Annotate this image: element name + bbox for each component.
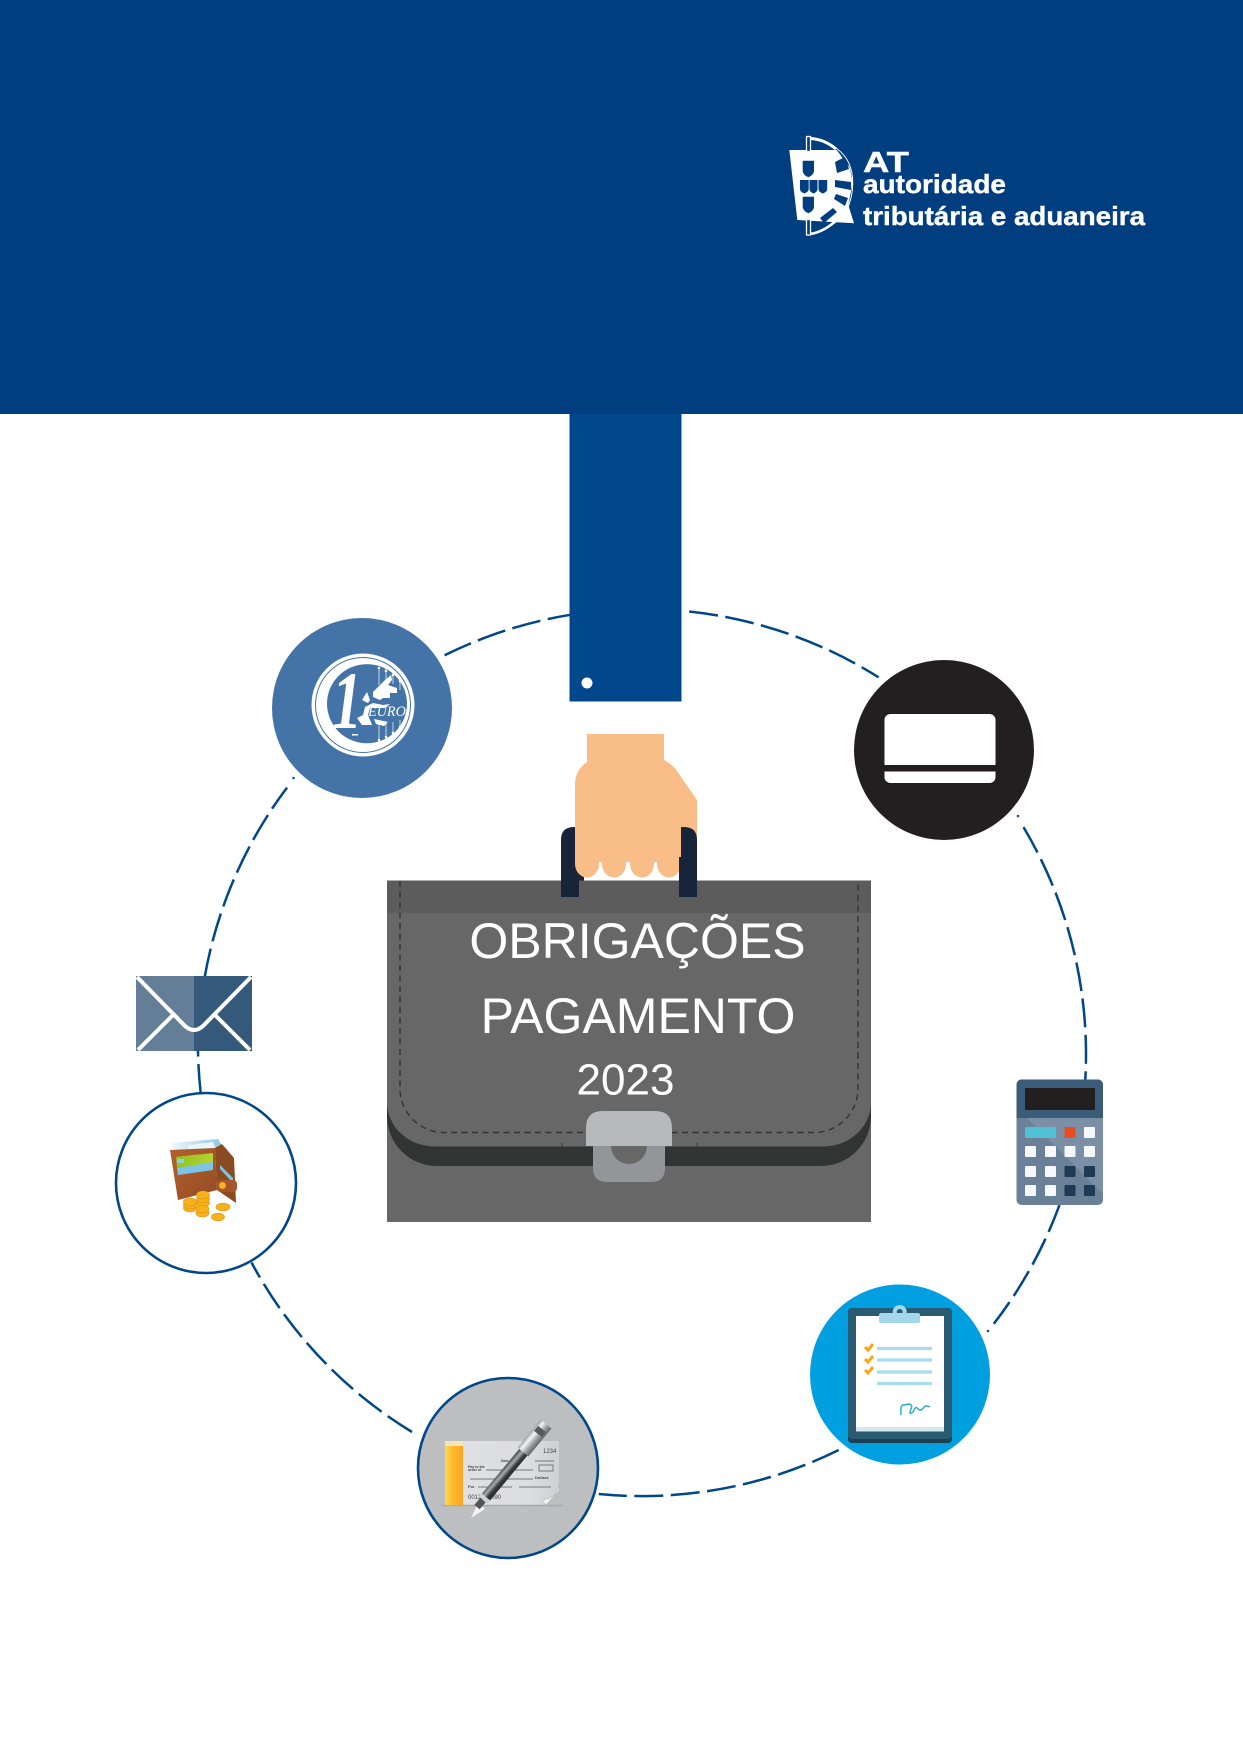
cheque shelf <box>441 1504 563 1506</box>
coin numeral: 1 <box>332 655 362 746</box>
calculator display <box>1025 1088 1095 1110</box>
handle right <box>679 827 697 897</box>
signature <box>901 1404 930 1415</box>
cheque lines <box>470 1461 554 1487</box>
cheque text: 090 <box>491 1495 502 1501</box>
clasp lower <box>593 1146 665 1182</box>
icon: bank card <box>854 660 1034 840</box>
cheque text: Dollars <box>535 1475 549 1480</box>
wallet card green <box>176 1153 213 1168</box>
cheque text: 1234 <box>543 1449 557 1455</box>
envelope flap lines <box>137 977 251 1050</box>
title: OBRIGAÇÕES <box>469 913 806 969</box>
cheque stub <box>445 1441 463 1505</box>
logo wordmark: tributária e aduaneira <box>863 201 1146 231</box>
europe map <box>352 675 397 736</box>
cheque text <box>468 1449 557 1501</box>
handle left <box>561 827 584 897</box>
wallet flap pocket <box>220 1165 233 1183</box>
title <box>469 913 806 1104</box>
title: PAGAMENTO <box>481 988 795 1044</box>
title: 2023 <box>577 1056 674 1104</box>
icon: wallet and coins <box>116 1093 296 1273</box>
hand <box>575 734 697 878</box>
logo wordmark <box>863 147 1146 231</box>
calculator shade <box>1027 1118 1103 1194</box>
card <box>884 714 996 783</box>
pen <box>471 1424 546 1518</box>
coin star lines <box>378 667 401 742</box>
icon: clipboard <box>810 1284 990 1464</box>
flap shadow <box>387 1103 871 1166</box>
coins <box>184 1191 230 1221</box>
stitching <box>400 881 858 1132</box>
wallet paper <box>172 1139 228 1156</box>
icon: euro coin <box>272 618 452 798</box>
paper <box>856 1316 944 1431</box>
icon: envelope <box>136 976 252 1051</box>
cheque page curl <box>542 1484 559 1505</box>
cuff button <box>582 678 592 688</box>
icon: cheque and pen <box>418 1378 598 1558</box>
clip <box>879 1305 920 1323</box>
clasp hole <box>611 1146 647 1164</box>
dashed ring connecting the icons <box>198 612 1086 1496</box>
cheque text: order of <box>468 1468 482 1472</box>
sleeve <box>570 414 682 702</box>
cheque <box>445 1441 559 1505</box>
cheque amount box <box>539 1465 553 1471</box>
logo wordmark: autoridade <box>863 169 1006 199</box>
handle stems <box>561 880 697 897</box>
wallet clasp <box>217 1180 237 1192</box>
wallet back <box>170 1148 217 1200</box>
logo: autoridade tributaria e aduaneira <box>789 136 1146 235</box>
briefcase body <box>387 880 871 1222</box>
coin label: EURO <box>367 704 406 720</box>
cheque text: Pay to the <box>468 1465 485 1469</box>
header band <box>0 0 1243 414</box>
card stripe <box>884 765 996 772</box>
checklist lines <box>877 1348 932 1384</box>
briefcase top band <box>387 880 871 913</box>
coin ring <box>312 654 414 756</box>
wallet flap <box>215 1144 236 1203</box>
calculator top <box>1016 1080 1103 1118</box>
clasp top <box>586 1111 672 1146</box>
cheque text: Date <box>501 1459 509 1463</box>
logo emblem <box>789 136 854 235</box>
briefcase <box>387 880 871 1222</box>
logo wordmark: AT <box>863 147 909 179</box>
cheque text: 00123 <box>468 1495 485 1501</box>
cheque text: For <box>468 1484 475 1489</box>
check marks <box>865 1344 873 1373</box>
hand holding briefcase <box>561 734 697 897</box>
calculator keys <box>1025 1127 1095 1196</box>
icon: calculator <box>1016 1080 1103 1205</box>
wallet card blue <box>177 1162 213 1175</box>
flap ticks <box>562 1143 697 1147</box>
board <box>848 1308 952 1443</box>
